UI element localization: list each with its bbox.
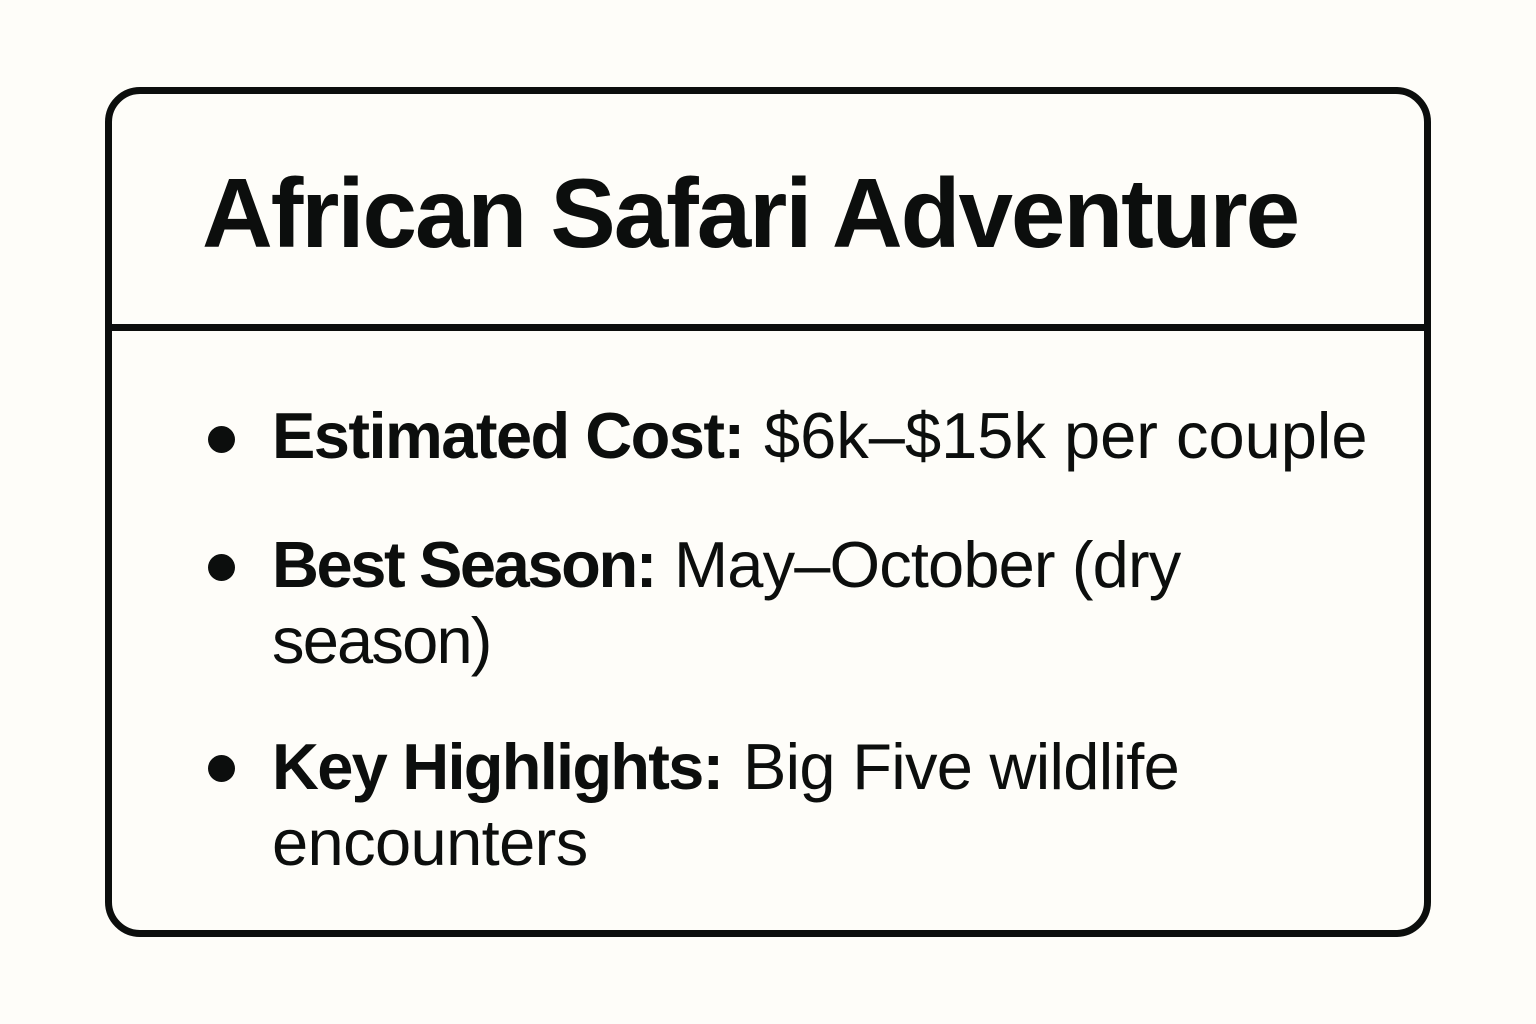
bullet: season xyxy=(208,554,235,581)
text: estimated cost: $6k–$15k per couple xyxy=(764,399,1368,472)
heading divider xyxy=(110,324,1426,331)
text: estimated cost: Estimated Cost: xyxy=(272,399,744,472)
title: African Safari Adventure xyxy=(202,158,1298,268)
bullet: highlights xyxy=(208,755,235,782)
text: key highlights: Key Highlights: xyxy=(272,730,722,803)
text: best season: May–October (dry xyxy=(674,528,1180,601)
text: best season continued: season) xyxy=(272,604,491,677)
text: key highlights xyxy=(272,730,1179,803)
text: best season xyxy=(272,528,1182,601)
text: best season: Best Season: xyxy=(272,528,655,601)
text: key highlights: Big Five wildlife xyxy=(743,730,1179,803)
text: key highlights continued: encounters xyxy=(272,806,588,879)
text: estimated cost xyxy=(272,399,1368,472)
bullet: cost xyxy=(208,426,235,453)
panel: card xyxy=(105,87,1431,937)
